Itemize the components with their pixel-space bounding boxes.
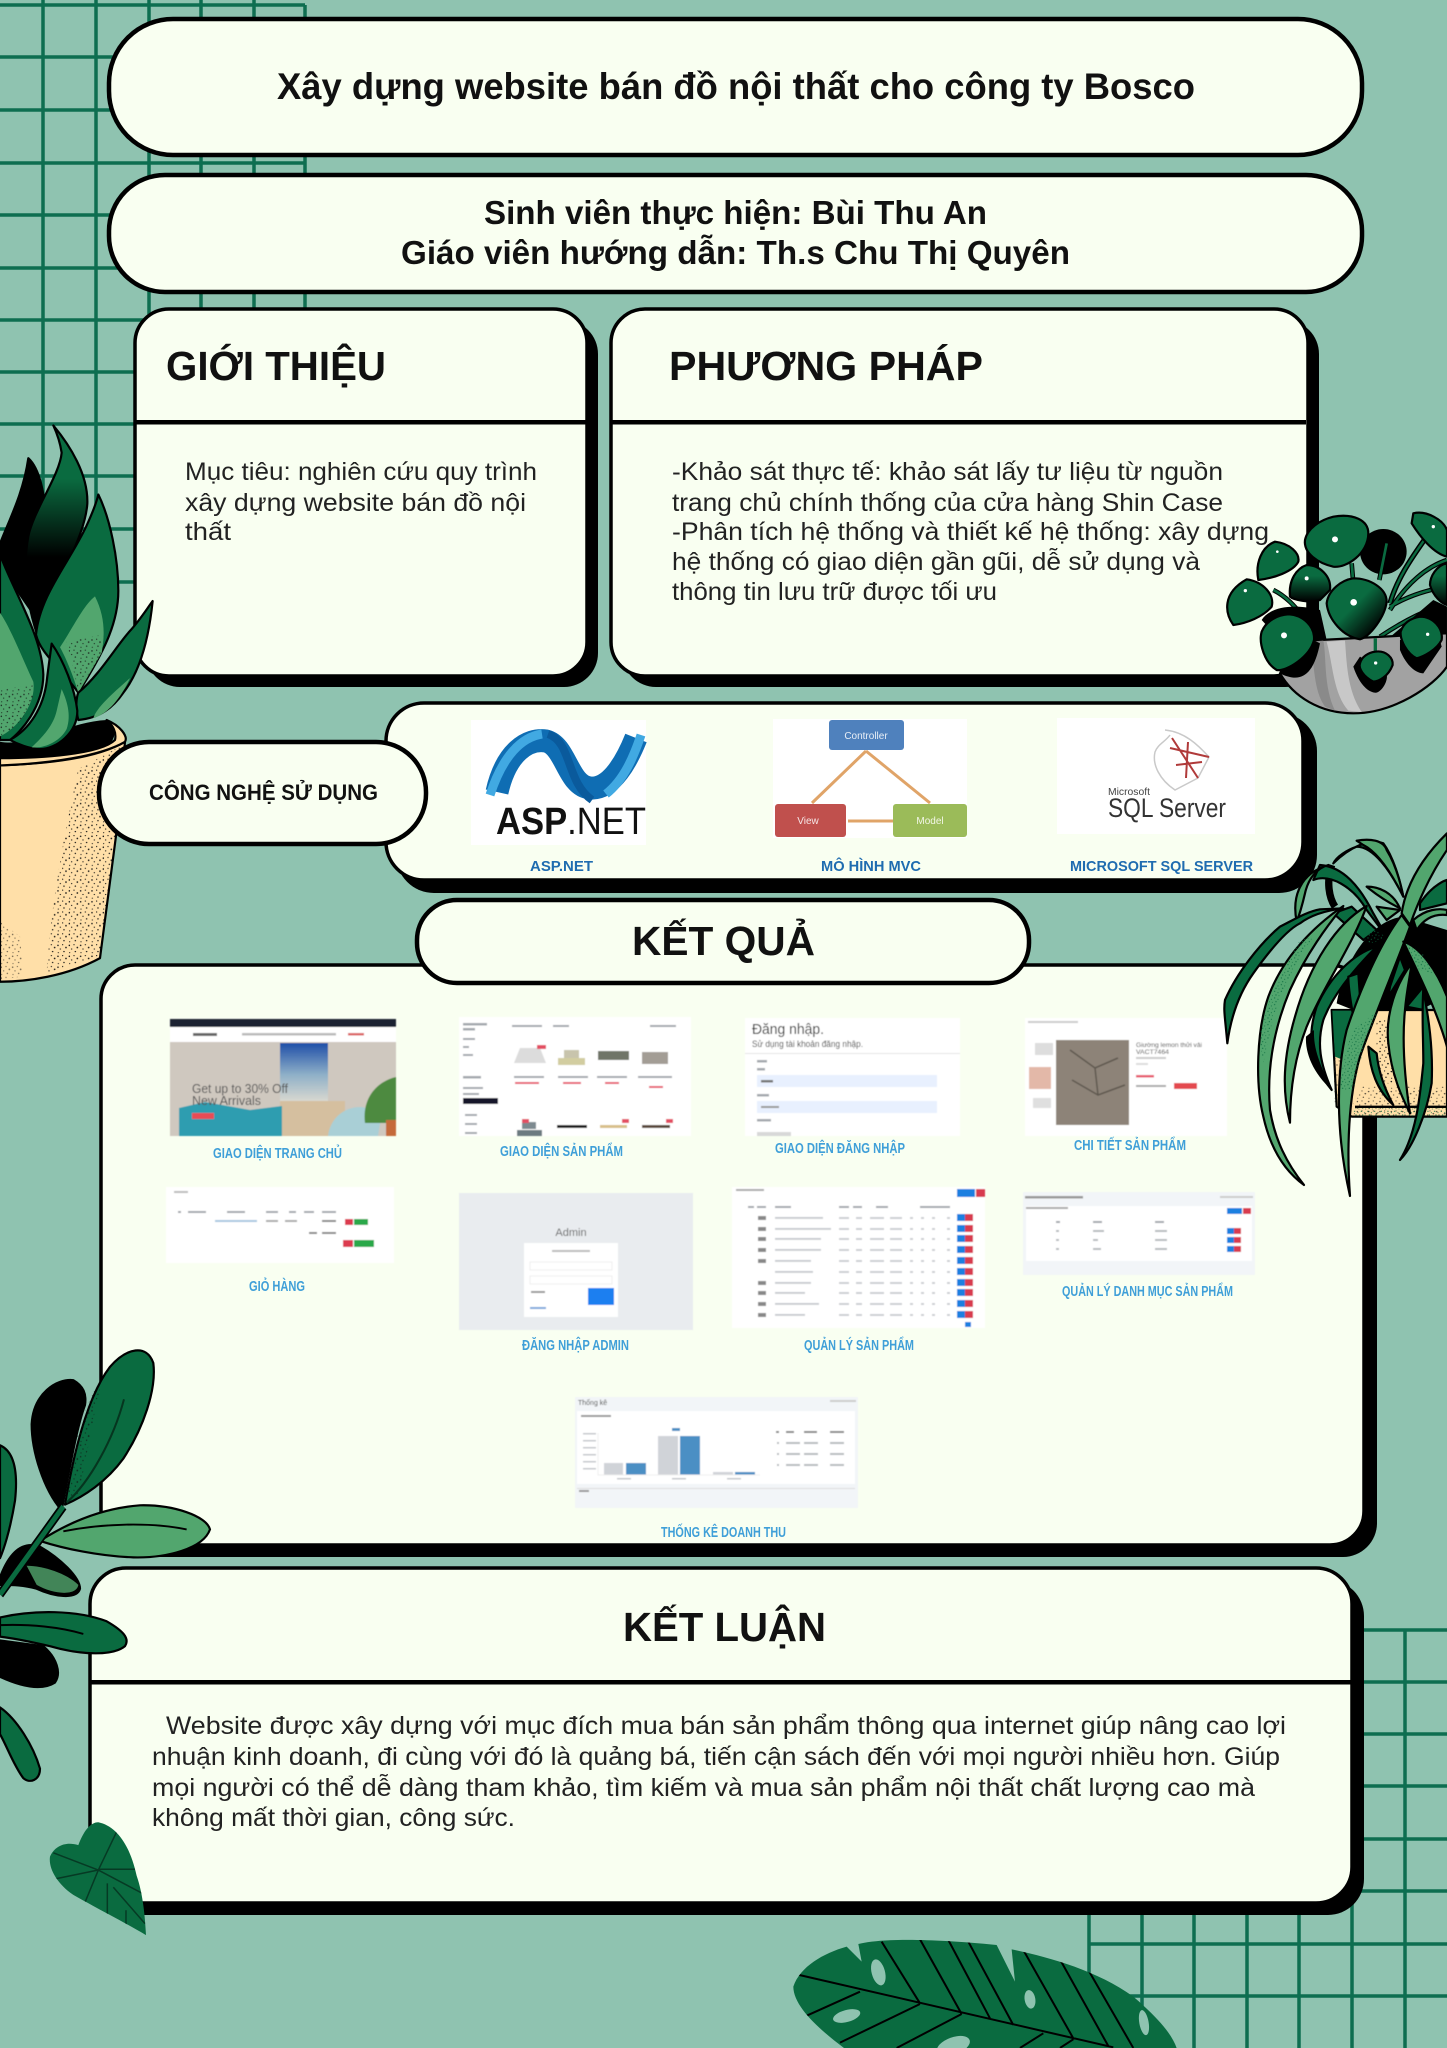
caption: chi tiết sản phẩm: CHI TIẾT SẢN PHẨM [1074,1136,1186,1154]
screenshot: đăng nhập: Sử dụng tài khoản đăng nhập. [752,1039,863,1049]
heading: kết luận: KẾT LUẬN [623,1604,826,1650]
text: kết luận: nhuận kinh doanh, đi cùng với đó là quảng bá, tiến cận sách đến với mọi người nhiều hơn. Giúp [152,1743,1280,1771]
screenshot: quản lý sản phẩm [732,1187,985,1328]
diagram: mvc model [773,719,967,838]
caption: asp.net: ASP.NET [530,858,593,875]
logo: sql server: SQL Server [1108,793,1226,823]
text: phương pháp: thông tin lưu trữ được tối ưu [672,578,997,606]
text: mục tiêu: xây dựng website bán đồ nội [185,489,526,517]
screenshot: giỏ hàng [166,1187,394,1263]
text: kết luận [152,1712,1286,1832]
caption: giao diện đăng nhập: GIAO DIỆN ĐĂNG NHẬP [775,1139,905,1157]
text: kết luận: Website được xây dựng với mục đích mua bán sản phẩm thông qua internet giúp nâng cao lợi [166,1712,1286,1740]
screenshot: trang chủ: New Arrivals [192,1093,261,1108]
pill: công nghệ sử dụng [99,742,426,844]
diagram: mvc model: Model [916,816,944,827]
panel: kết quả [101,965,1377,1557]
diagram: mvc model: View [797,816,820,827]
text: mục tiêu [185,458,537,546]
pill: kết quả [417,900,1029,983]
screenshot: đăng nhập admin [459,1193,693,1330]
caption: microsoft sql server: MICROSOFT SQL SERVER [1070,858,1253,875]
logo: sql server [1057,718,1255,834]
plant: hanging spider plant right [1224,833,1447,1196]
panel: công nghệ sử dụng [386,703,1317,893]
heading: kết quả: KẾT QUẢ [632,918,815,964]
background grid: top left [0,0,305,582]
screenshot: quản lý danh mục [1023,1192,1255,1275]
text: phương pháp: trang chủ chính thống của cửa hàng Shin Case [672,489,1223,517]
text: kết luận: mọi người có thể dễ dàng tham khảo, tìm kiếm và mua sản phẩm nội thất chất lượng cao mà [152,1773,1255,1802]
screenshot: đăng nhập: Đăng nhập. [752,1021,824,1038]
screenshot: trang chủ [170,1019,396,1136]
student name: Sinh viên thực hiện: Bùi Thu An [484,194,987,231]
title pill [109,19,1362,155]
plant: pilea in grey bowl right [1227,513,1447,713]
screenshot: chi tiết sản phẩm [1025,1018,1227,1136]
logo: asp.net [471,720,646,845]
screenshot: thống kê doanh thu [575,1397,858,1508]
screenshot: đăng nhập admin: Admin [555,1227,587,1239]
logo: asp.net: ASP.NET [496,801,646,843]
screenshot: chi tiết sản phẩm: VACT7464 [1136,1049,1169,1056]
caption: thống kê doanh thu: THỐNG KÊ DOANH THU [661,1523,786,1541]
caption: quản lý danh mục sản phẩm: QUẢN LÝ DANH MỤC SẢN PHẨM [1062,1282,1233,1300]
plant: potted snake plant left [0,425,153,982]
screenshot: thống kê doanh thu: Thống kê [578,1398,607,1407]
text: kết luận: không mất thời gian, công sức. [152,1804,515,1832]
logo: sql server: Microsoft [1108,786,1150,798]
title text: Xây dựng website bán đồ nội thất cho công ty Bosco [277,66,1195,107]
caption: quản lý sản phẩm: QUẢN LÝ SẢN PHẨM [804,1336,914,1354]
caption: giao diện sản phẩm: GIAO DIỆN SẢN PHẨM [500,1142,623,1160]
heading: giới thiệu: GIỚI THIỆU [166,343,386,389]
caption: mô hình mvc: MÔ HÌNH MVC [821,857,921,875]
screenshot: đăng nhập [745,1018,960,1136]
heading: phương pháp: PHƯƠNG PHÁP [669,343,983,389]
text: phương pháp: -Khảo sát thực tế: khảo sát lấy tư liệu từ nguồn [672,458,1223,486]
caption: giỏ hàng: GIỎ HÀNG [249,1277,305,1295]
teacher name: Giáo viên hướng dẫn: Th.s Chu Thị Quyên [401,234,1070,271]
background grid: bottom right [1089,1630,1447,2048]
text: mục tiêu: thất [185,518,231,546]
panel: giới thiệu [135,309,598,687]
diagram: mvc model: Controller [844,731,888,742]
screenshot: chi tiết sản phẩm: Giường lemon thửi vải [1136,1041,1202,1049]
caption: đăng nhập admin: ĐĂNG NHẬP ADMIN [522,1336,629,1354]
panel: phương pháp [611,309,1319,687]
label: công nghệ sử dụng: CÔNG NGHỆ SỬ DỤNG [149,780,378,805]
text: phương pháp: -Phân tích hệ thống và thiết kế hệ thống: xây dựng [672,518,1269,546]
text: phương pháp: hệ thống có giao diện gần gũi, dễ sử dụng và [672,547,1200,576]
author pill [109,175,1362,292]
screenshot: trang chủ: Get up to 30% Off [192,1081,288,1096]
plant: monstera leaf bottom [793,1939,1177,2048]
plant: small heart leaf [50,1822,146,1935]
screenshot: sản phẩm [459,1017,691,1136]
panel: kết luận [90,1568,1364,1915]
caption: giao diện trang chủ: GIAO DIỆN TRANG CHỦ [213,1144,342,1162]
plant: left leafy branch [0,1350,210,1781]
text: phương pháp [672,458,1269,606]
text: mục tiêu: Mục tiêu: nghiên cứu quy trình [185,458,537,486]
